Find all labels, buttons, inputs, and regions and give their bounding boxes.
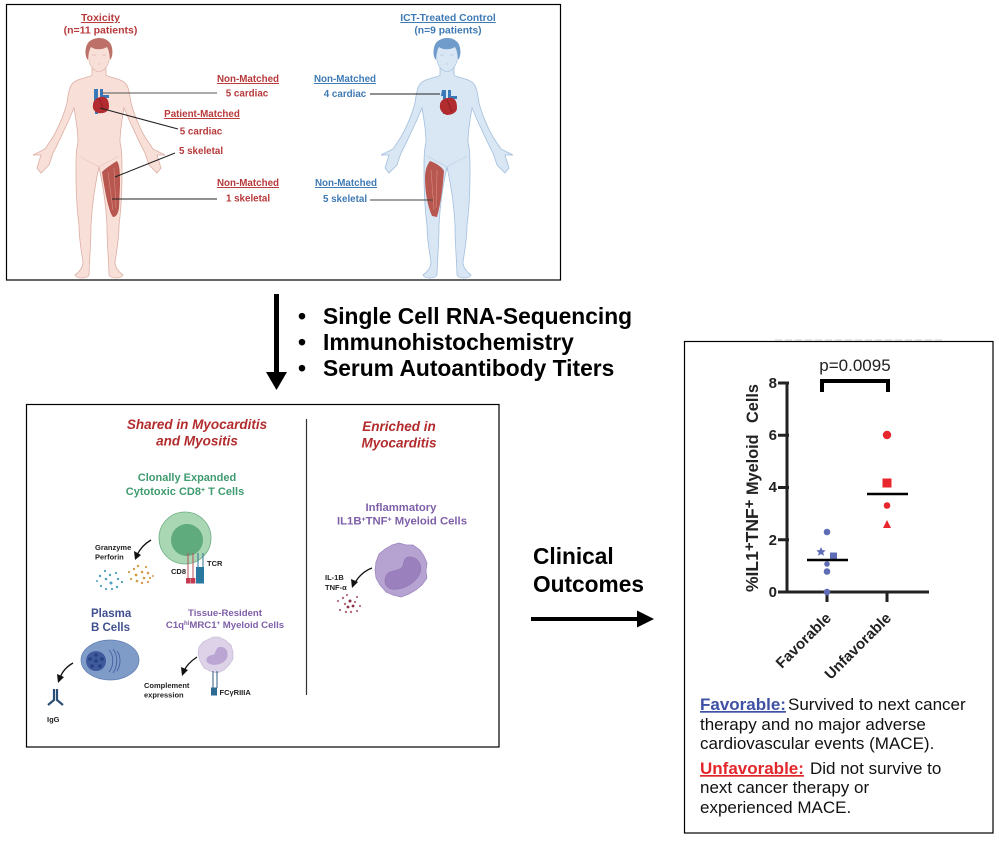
text: control cardiac label: Non-Matched [314, 74, 376, 85]
text: control heading: ICT-Treated Control [400, 13, 496, 24]
label: granzyme perforin: Perforin [95, 552, 124, 562]
unfavorable median line [867, 493, 908, 495]
text: clonally expanded CD8 T cells: T Cells [205, 486, 244, 498]
text: toxicity heading: (n=11 patients) [64, 24, 137, 36]
text: plasma B cells: B Cells [91, 622, 130, 634]
text: non-matched skeletal label: Non-Matched [217, 178, 279, 189]
text: clinical outcomes: Clinical [533, 543, 614, 569]
heading: shared in myocarditis and myositis: Shared in Myocarditis [127, 417, 268, 432]
text: tissue-resident myeloid cells: + [217, 621, 221, 627]
heading: enriched in myocarditis: Enriched in [362, 419, 436, 434]
label: IL-1B TNF-alpha: TNF-α [325, 583, 347, 592]
icon: cytokine dots [337, 594, 361, 613]
label: FCyRIIIA: FCγRIIIA [220, 688, 251, 697]
arrow: non-matched skeletal leader [112, 198, 217, 200]
text: assay list: Serum Autoantibody Titers [323, 355, 614, 381]
text: inflammatory myeloid cells: Inflammatory [366, 502, 437, 514]
icon: inflammatory myeloid cell [375, 543, 427, 597]
chart: IL1+TNF+ myeloid cells by outcome [741, 356, 929, 683]
x axis [778, 592, 929, 602]
arrow: plasma cell to IgG [57, 663, 73, 683]
y axis title: + [741, 499, 758, 508]
text: tissue-resident myeloid cells: Myeloid Cells [220, 620, 284, 631]
text: inflammatory myeloid cells: IL1B [337, 516, 361, 528]
clipped chart title remnant above panel [775, 339, 943, 341]
text: plasma B cells: Plasma [91, 608, 132, 620]
heading: enriched in myocarditis: Myocarditis [361, 436, 437, 450]
arrow: down to assays [266, 294, 287, 390]
x label: favorable: Favorable [773, 610, 835, 672]
text: clinical outcomes: Outcomes [533, 571, 644, 597]
legend: favorable definition: Favorable: [700, 695, 786, 714]
p value: p=0.0095 [819, 356, 891, 375]
y axis title: %IL1 [742, 551, 762, 592]
legend: unfavorable definition: Unfavorable: [700, 759, 804, 778]
text: clonally expanded CD8 T cells: + [201, 487, 205, 494]
text: inflammatory myeloid cells: + [388, 516, 392, 524]
x label: unfavorable: Unfavorable [821, 610, 895, 683]
text: control skeletal label: Non-Matched [315, 178, 377, 189]
arrow: control skeletal leader [370, 199, 433, 201]
icon: control patient body [381, 38, 513, 278]
text: patient-matched label: Patient-Matched [164, 109, 240, 120]
text: tissue-resident myeloid cells: hi [184, 621, 190, 627]
text: assay bullets: • [298, 303, 306, 329]
y axis title: + [741, 542, 758, 551]
favorable median line [807, 559, 848, 561]
y tick labels: 2 [769, 532, 777, 549]
text: non-matched cardiac label: 5 cardiac [226, 88, 269, 100]
arrow: T cell secretion [134, 540, 151, 560]
text: tissue-resident myeloid cells: C1q [166, 620, 184, 631]
icon: plasma cell [81, 640, 139, 680]
heading: shared in myocarditis and myositis: and Myositis [156, 434, 238, 448]
text: toxicity heading: Toxicity [81, 12, 120, 24]
text: control cardiac label: 4 cardiac [324, 89, 367, 100]
text: inflammatory myeloid cells: + [361, 516, 366, 524]
legend: favorable definition: cardiovascular events (MACE). [700, 734, 934, 753]
text: non-matched skeletal label: 1 skeletal [226, 194, 270, 204]
y axis title: Myeloid [744, 434, 762, 495]
arrow: cytokine secretion [351, 568, 372, 588]
y tick labels: 8 [769, 375, 777, 392]
legend: favorable definition: therapy and no major adverse [700, 715, 926, 734]
legend: unfavorable definition: next cancer therapy or [700, 778, 869, 797]
icon: IgG antibody [48, 689, 63, 705]
arrow: to outcomes chart [531, 610, 654, 628]
text: assay list: Immunohistochemistry [323, 329, 574, 355]
icon: perforin dots [128, 565, 154, 584]
y axis [778, 383, 789, 592]
arrow: complement secretion [181, 657, 197, 676]
panel: patient cohorts and biopsies [6, 4, 560, 280]
icon: toxicity patient body [33, 38, 165, 278]
text: inflammatory myeloid cells: Myeloid Cells [392, 516, 467, 528]
text: assay list: Single Cell RNA-Sequencing [323, 303, 632, 329]
text: tissue-resident myeloid cells: MRC1 [189, 620, 217, 631]
arrow: patient-matched cardiac leader [100, 108, 178, 129]
icon: control heart [440, 90, 457, 115]
arrow: patient-matched skeletal leader [115, 153, 175, 177]
text: control heading: (n=9 patients) [414, 26, 482, 36]
panel: outcome chart and legend [684, 342, 993, 833]
label: IL-1B TNF-alpha: IL-1B [325, 573, 344, 582]
icon: control thigh muscle [425, 161, 444, 217]
text: control skeletal label: 5 skeletal [323, 194, 367, 205]
label: complement expression: Complement [144, 681, 190, 690]
text: clonally expanded CD8 T cells: Cytotoxic CD8 [126, 486, 201, 498]
legend: unfavorable definition: experienced MACE. [700, 798, 851, 817]
text: inflammatory myeloid cells: TNF [366, 516, 388, 528]
label: IgG: IgG [47, 715, 60, 724]
icon: toxicity thigh muscle [102, 161, 120, 217]
unfavorable data points [882, 431, 892, 528]
y axis title: TNF [742, 508, 762, 542]
label: TCR: TCR [207, 559, 223, 568]
text: tissue-resident myeloid cells: Tissue-Resident [188, 608, 263, 619]
label: complement expression: expression [144, 690, 184, 700]
icon: toxicity heart [93, 89, 109, 114]
arrow: control cardiac leader [370, 93, 440, 95]
panel: cell findings [26, 404, 499, 747]
text: assay bullets: • [298, 329, 306, 355]
significance bracket [822, 381, 888, 392]
text: patient-matched label: 5 cardiac [180, 126, 223, 138]
label: granzyme perforin: Granzyme [95, 543, 131, 552]
favorable data points [816, 529, 837, 595]
y tick labels: 0 [769, 584, 777, 601]
icon: CD8 T cell with receptors [159, 512, 211, 584]
text: clonally expanded CD8 T cells: Clonally Expanded [138, 472, 236, 484]
y tick labels: 6 [769, 427, 777, 444]
text: assay bullets: • [298, 355, 306, 381]
y axis title: Cells [744, 384, 762, 423]
y tick labels: 4 [769, 479, 778, 496]
icon: granzyme dots [96, 570, 123, 590]
y tick labels [769, 375, 778, 601]
divider between columns [306, 419, 308, 695]
text: non-matched cardiac label: Non-Matched [217, 74, 279, 85]
legend: favorable definition: Survived to next cancer [788, 695, 966, 714]
label: CD8: CD8 [171, 567, 186, 576]
legend: unfavorable definition: Did not survive to [810, 759, 941, 778]
icon: tissue-resident myeloid cell [198, 637, 233, 696]
arrow: non-matched cardiac leader [102, 92, 217, 94]
text: patient-matched label: 5 skeletal [179, 146, 223, 157]
